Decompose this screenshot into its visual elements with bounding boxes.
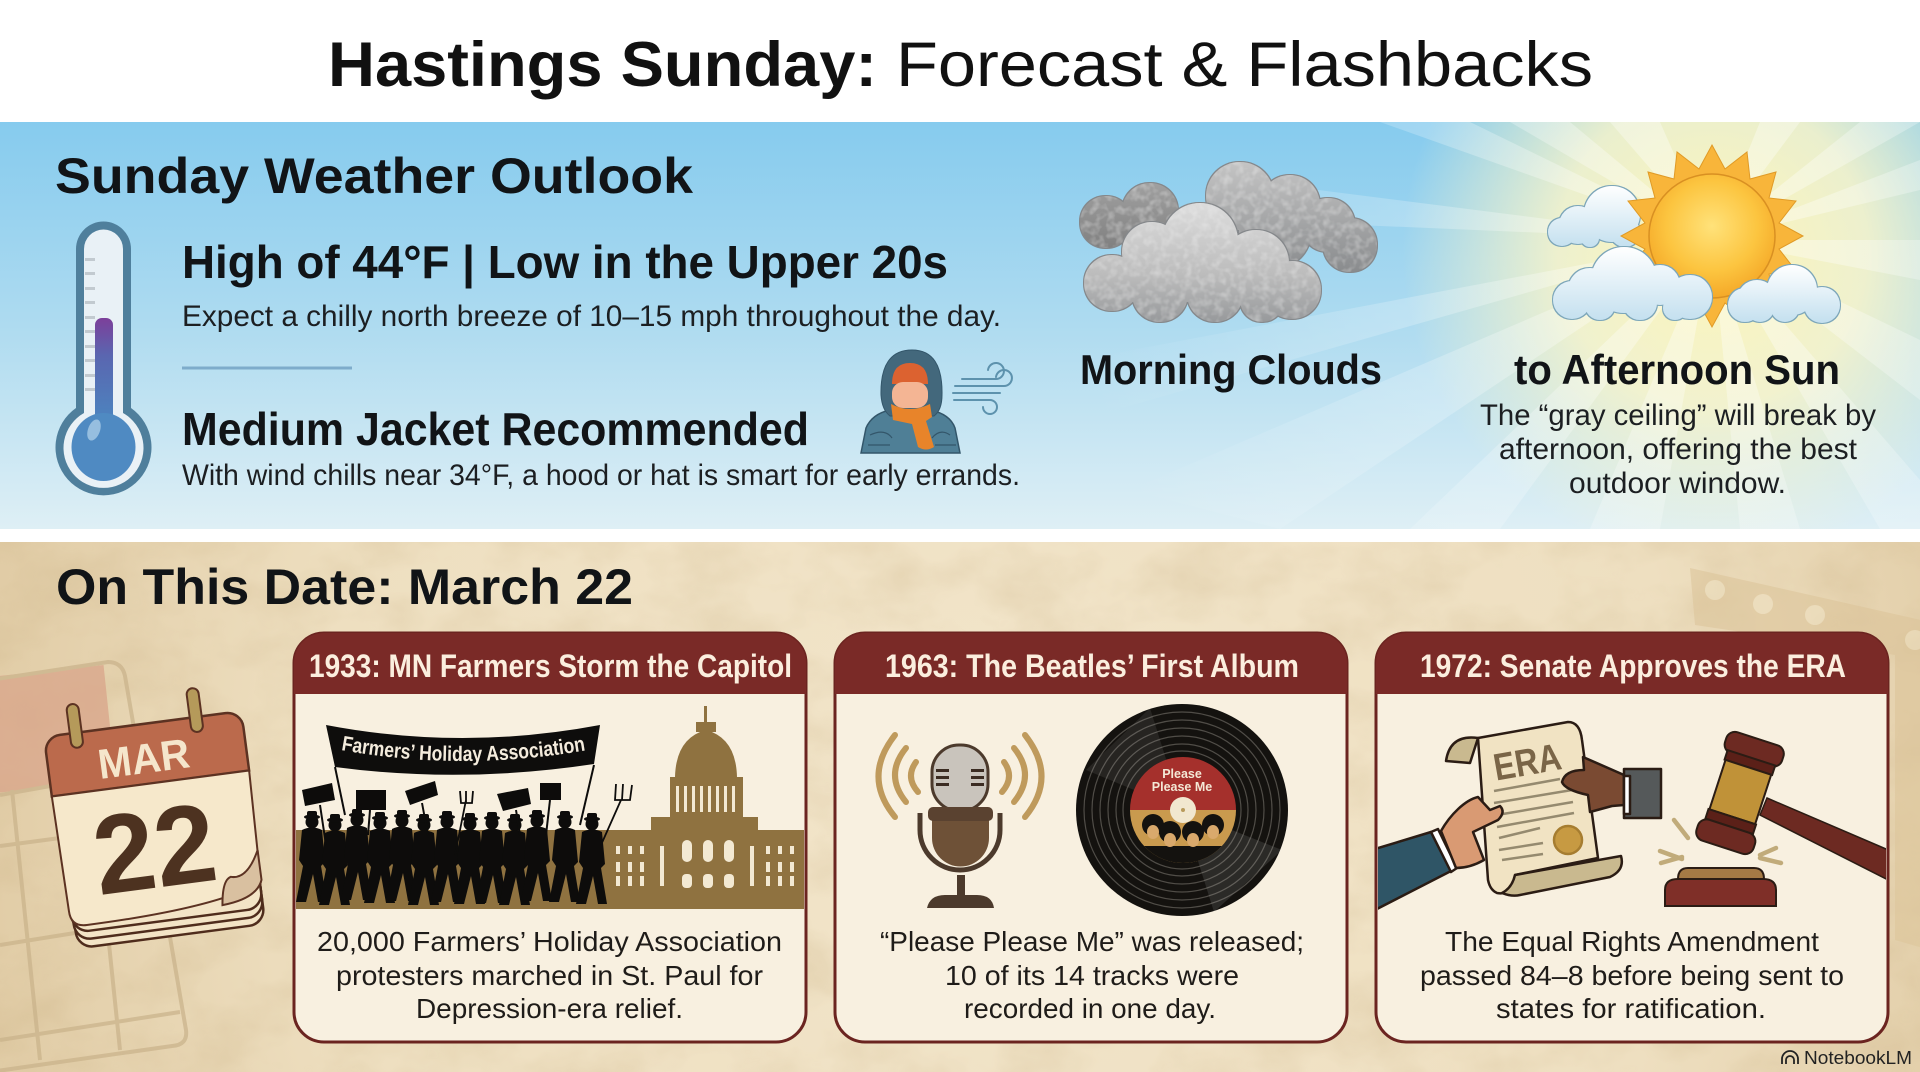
card body text: states for ratification. [1496, 993, 1766, 1024]
text: temperature headline: High of 44°F | Low in the Upper 20s [182, 236, 948, 288]
card heading: 1933: MN Farmers Storm the Capitol [309, 648, 792, 684]
panel: on this date [0, 542, 1920, 1072]
watermark: NotebookLM: NotebookLM [1804, 1048, 1912, 1068]
icon: wind [953, 363, 1012, 414]
card body text: recorded in one day. [964, 993, 1216, 1024]
band silhouettes [1142, 814, 1224, 863]
pitchforks [458, 784, 633, 844]
protest banner: Farmers’ Holiday Association [342, 736, 585, 766]
gavel sound block [1678, 868, 1764, 879]
icon: sun behind clouds [1548, 145, 1840, 327]
heading: Sunday Weather Outlook: Sunday Weather Outlook [55, 148, 693, 204]
panel: weather outlook [0, 122, 1920, 529]
illustration: ERA scroll and gavel [1375, 722, 1900, 910]
record label text: Please Me [1152, 780, 1212, 794]
text: afternoon outlook: outdoor window. [1569, 467, 1786, 500]
text: MAR: MAR [95, 729, 192, 788]
gavel strike marks [1660, 820, 1781, 863]
card body text [880, 926, 1304, 1024]
card body text: “Please Please Me” was released; [880, 926, 1304, 957]
illustration: capitol and marchers [296, 706, 804, 909]
card: 1972 ERA [1375, 633, 1900, 1042]
card body text: The Equal Rights Amendment [1445, 926, 1819, 957]
ghost calendar right [1690, 568, 1920, 950]
protest banner [326, 725, 600, 826]
title: Hastings Sunday: [328, 30, 877, 100]
card body text: 10 of its 14 tracks were [945, 960, 1239, 991]
text: afternoon outlook [1480, 399, 1876, 500]
icon: right hand and cuff [1562, 757, 1661, 818]
capitol building [296, 706, 804, 909]
record label text [1152, 767, 1212, 794]
icon: gavel [1660, 730, 1900, 906]
text: ERA: ERA [1490, 736, 1565, 790]
label: to Afternoon Sun: to Afternoon Sun [1514, 346, 1840, 393]
text: jacket headline: Medium Jacket Recommended [182, 403, 809, 455]
text: afternoon outlook: afternoon, offering the best [1499, 433, 1858, 466]
protest signs [302, 781, 561, 845]
icon: left hand and sleeve [1375, 797, 1503, 910]
card body text [317, 926, 782, 1024]
card body text: protesters marched in St. Paul for [336, 960, 763, 991]
card: 1933 farmers [292, 632, 808, 1044]
icon: vinyl record [1076, 704, 1288, 916]
card body text: Depression-era relief. [416, 993, 683, 1024]
card heading: 1963: The Beatles’ First Album [885, 648, 1299, 684]
text: 22: 22 [86, 779, 223, 919]
card body text [1420, 926, 1844, 1024]
text: wind chill detail: With wind chills near 34°F, a hood or hat is smart for early errands. [182, 459, 1020, 492]
sun rays background [1236, 122, 1920, 529]
label: Morning Clouds: Morning Clouds [1080, 346, 1382, 393]
heading: On This Date: On This Date: March 22 [56, 559, 633, 615]
record label text: Please [1162, 767, 1202, 781]
icon: calendar MAR 22 [40, 682, 269, 949]
card body text: passed 84–8 before being sent to [1420, 960, 1844, 991]
marching silhouettes [296, 781, 632, 905]
title: Forecast & Flashbacks [896, 30, 1593, 100]
card body text: 20,000 Farmers’ Holiday Association [317, 926, 782, 957]
card: 1963 beatles [835, 633, 1347, 1042]
icon: thermometer [56, 222, 151, 495]
icon: morning clouds [1080, 162, 1377, 322]
title [328, 30, 1593, 100]
card heading: 1972: Senate Approves the ERA [1420, 648, 1846, 684]
ghost calendar left [0, 662, 186, 1072]
icon: scroll [1446, 722, 1622, 896]
text: afternoon outlook: The “gray ceiling” will break by [1480, 399, 1876, 432]
icon: person in hooded jacket [861, 350, 960, 453]
text: breeze detail: Expect a chilly north breeze of 10–15 mph throughout the day. [182, 300, 1001, 333]
icon: microphone [878, 735, 1042, 908]
